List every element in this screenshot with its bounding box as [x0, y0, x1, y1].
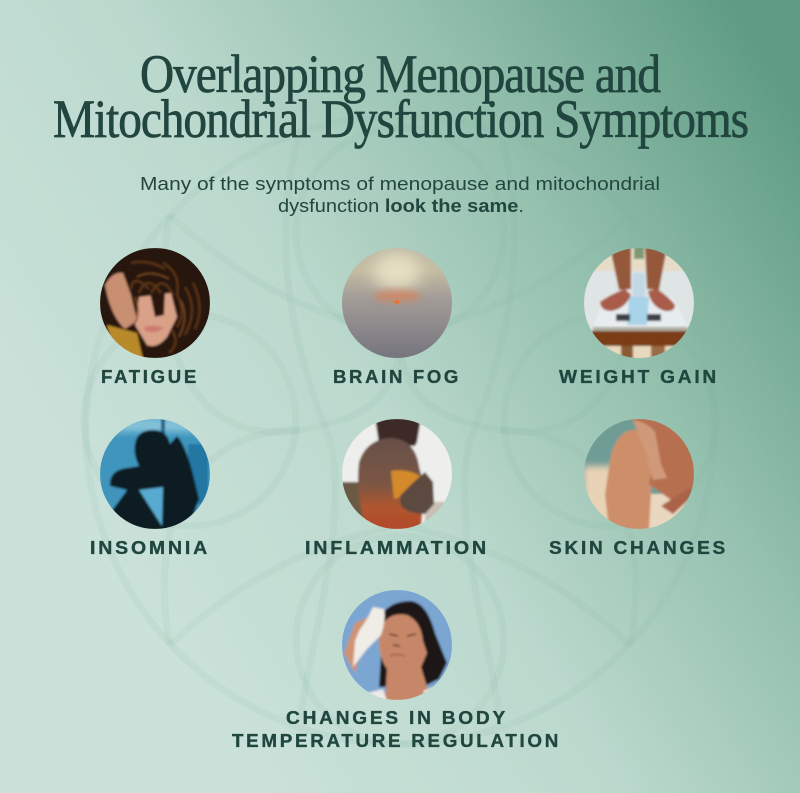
- intro text: Many of the symptoms of menopause and mitochondrial: [140, 174, 660, 194]
- intro text: [140, 174, 660, 216]
- label: fatigue: FATIGUE: [101, 367, 199, 387]
- label: weight gain: WEIGHT GAIN: [559, 367, 719, 387]
- photo: brain fog: [341, 247, 453, 359]
- intro text: dysfunction look the same .: [278, 196, 524, 216]
- background mandala pattern: [84, 116, 716, 744]
- label: inflammation: INFLAMMATION: [305, 538, 489, 558]
- label: brain fog: BRAIN FOG: [333, 367, 461, 387]
- label: skin changes: SKIN CHANGES: [549, 538, 728, 558]
- photo: insomnia: [99, 418, 211, 530]
- label: changes in body temperature regulation: TEMPERATURE REGULATION: [232, 731, 561, 751]
- label: changes in body temperature regulation: [232, 708, 561, 751]
- label: changes in body temperature regulation: CHANGES IN BODY: [286, 708, 508, 728]
- photo: inflammation: [341, 418, 455, 532]
- photo: fatigue: [99, 247, 211, 359]
- photo: body temperature: [341, 589, 453, 701]
- photo: skin changes: [584, 419, 694, 529]
- title: [53, 44, 748, 149]
- title: Overlapping Menopause and: [140, 44, 661, 104]
- photo: weight gain: [583, 247, 695, 360]
- label: insomnia: INSOMNIA: [90, 538, 210, 558]
